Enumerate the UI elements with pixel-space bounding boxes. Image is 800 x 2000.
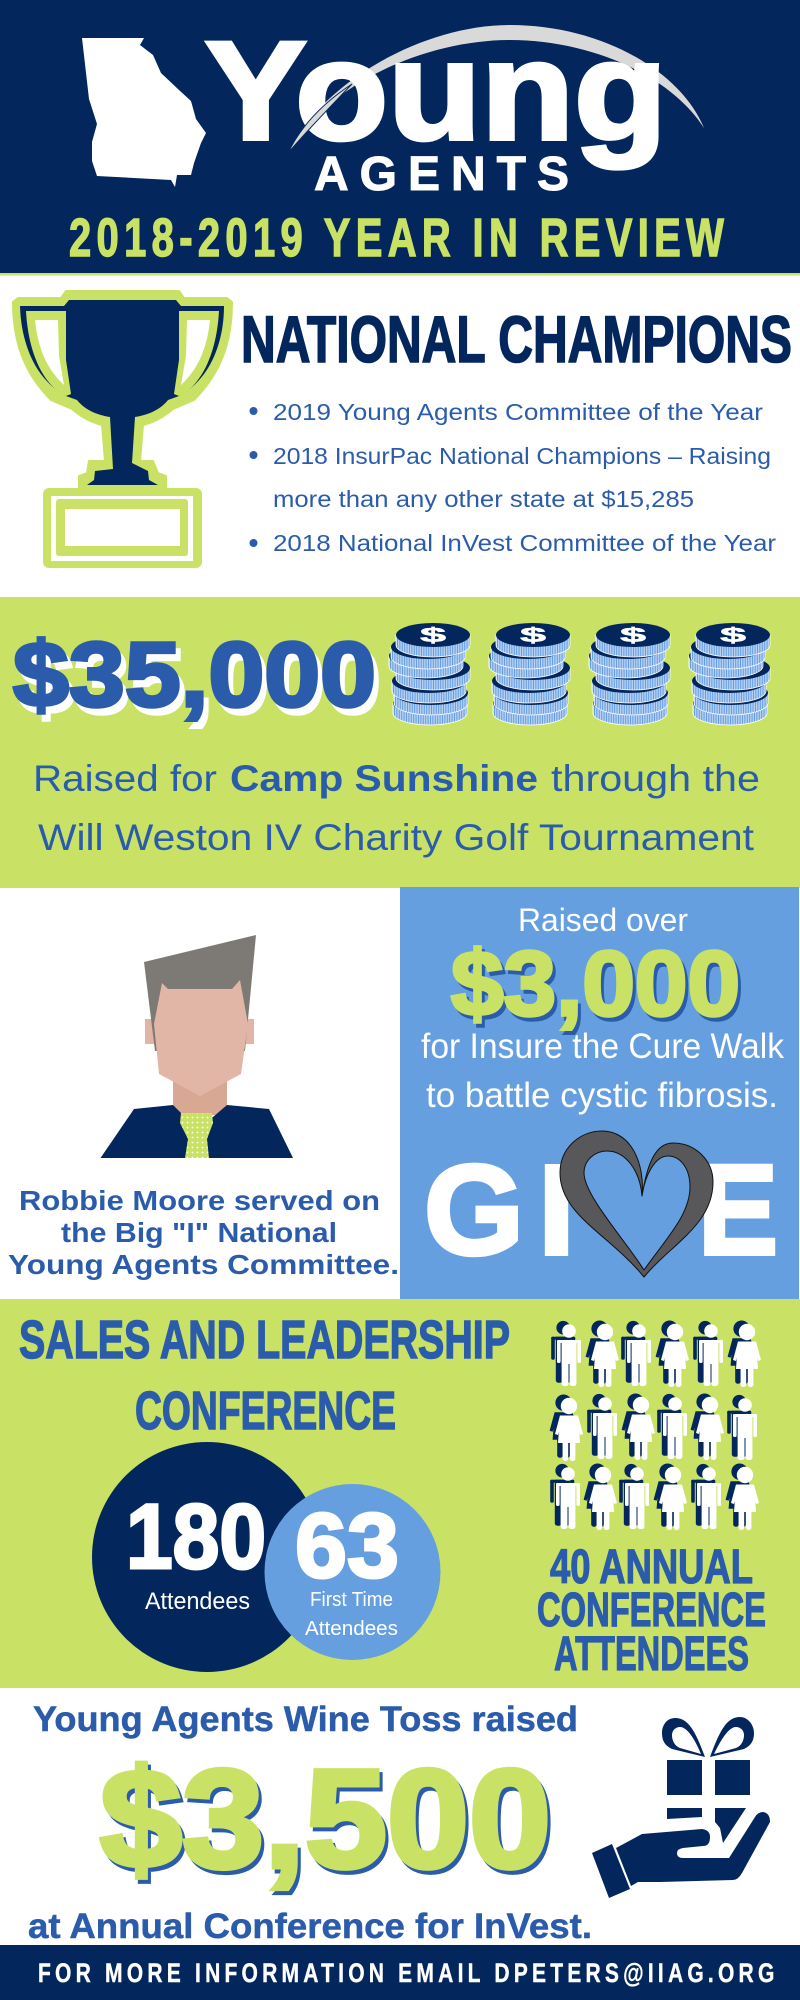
header panel [0, 0, 800, 276]
icon: trophy [13, 291, 232, 568]
logo swoosh [288, 25, 704, 153]
description: to battle cystic fibrosis. [426, 1076, 778, 1115]
icon: grid of people [550, 1320, 761, 1530]
bullet list: 2018 InsurPac National Champions – Raising [273, 443, 771, 469]
stat circle: 180 attendees: Attendees [145, 1588, 250, 1615]
caption: Robbie Moore served on [19, 1185, 380, 1216]
icon: Georgia state silhouette [82, 38, 206, 187]
bullet list: 2019 Young Agents Committee of the Year [273, 399, 763, 425]
panel: national champions [13, 291, 792, 568]
bullet list: 2018 National InVest Committee of the Year [273, 530, 776, 556]
text: conference line: at Annual Conference for InVest. [28, 1907, 592, 1946]
bullet list [250, 399, 776, 556]
logo swoosh crossing the o [288, 84, 352, 153]
big number: $3,000 [451, 933, 740, 1035]
caption: Raised for [33, 758, 217, 799]
panel: camp sunshine [0, 597, 800, 888]
big number shadow: $3,000 [454, 937, 743, 1039]
text: wine toss heading: Young Agents Wine Toss raised [33, 1700, 578, 1739]
description [421, 1027, 784, 1115]
heading: SALES AND LEADERSHIP [19, 1310, 510, 1370]
panel: Robbie Moore [0, 888, 400, 1300]
big number: $3,500 [100, 1740, 551, 1897]
panel: sales and leadership conference [0, 1299, 800, 1688]
big number: $35,000 [13, 624, 376, 726]
stat circle: 63 first time attendees [264, 1484, 440, 1660]
caption: Will Weston IV Charity Golf Tournament [38, 817, 755, 858]
stat circle: 63 first time attendees: First Time [310, 1589, 393, 1611]
caption: Young Agents Committee. [8, 1249, 399, 1280]
bullet list: more than any other state at $15,285 [273, 486, 694, 512]
panel: insure the cure [400, 887, 799, 1300]
icon: coin stack 3 [589, 623, 670, 725]
text: raised over: Raised over [518, 902, 688, 938]
word GIVE with heart [424, 1131, 778, 1282]
icon: coin stack 1: $ [420, 625, 446, 647]
footer [0, 1945, 800, 2000]
caption: Camp Sunshine [230, 758, 538, 799]
heading [19, 1310, 510, 1441]
description: for Insure the Cure Walk [421, 1027, 784, 1066]
stat circle: 180 attendees [92, 1442, 322, 1672]
icon: coin stack 2 [489, 623, 570, 725]
icon: coin stack 4: $ [720, 625, 746, 647]
icon: man portrait [100, 935, 293, 1158]
caption [8, 1185, 399, 1280]
caption: the Big "I" National [61, 1217, 337, 1248]
logo word Young: Young [205, 12, 667, 169]
logo word AGENTS: AGENTS [314, 148, 569, 201]
icon: hand holding gift [592, 1717, 770, 1898]
panel: wine toss [0, 1688, 800, 1946]
icon: coin stack 1 [389, 623, 470, 725]
word GIVE with heart: G [424, 1139, 524, 1282]
word GIVE with heart: I [538, 1139, 575, 1282]
word GIVE with heart: E [698, 1139, 778, 1282]
heading: CONFERENCE [135, 1381, 396, 1441]
big number shadow: $3,500 [103, 1744, 554, 1901]
icon: coin stack 3: $ [620, 625, 646, 647]
caption [33, 758, 760, 858]
big number shadow: $35,000 [18, 631, 381, 733]
stat circle: 180 attendees: 180 [126, 1486, 266, 1588]
stat circle: 63 first time attendees: Attendees [305, 1618, 398, 1640]
footer: FOR MORE INFORMATION EMAIL DPETERS@IIAG.ORG [38, 1959, 774, 1989]
title: 2018-2019 YEAR IN REVIEW [69, 208, 724, 269]
icon: coin stack 4 [689, 623, 770, 725]
caption: 40 annual conference attendees [537, 1541, 766, 1681]
caption: through the [551, 758, 760, 799]
icon: coin stack 2: $ [520, 625, 546, 647]
icon: heart [560, 1131, 713, 1277]
stat circle: 63 first time attendees: 63 [295, 1495, 399, 1597]
